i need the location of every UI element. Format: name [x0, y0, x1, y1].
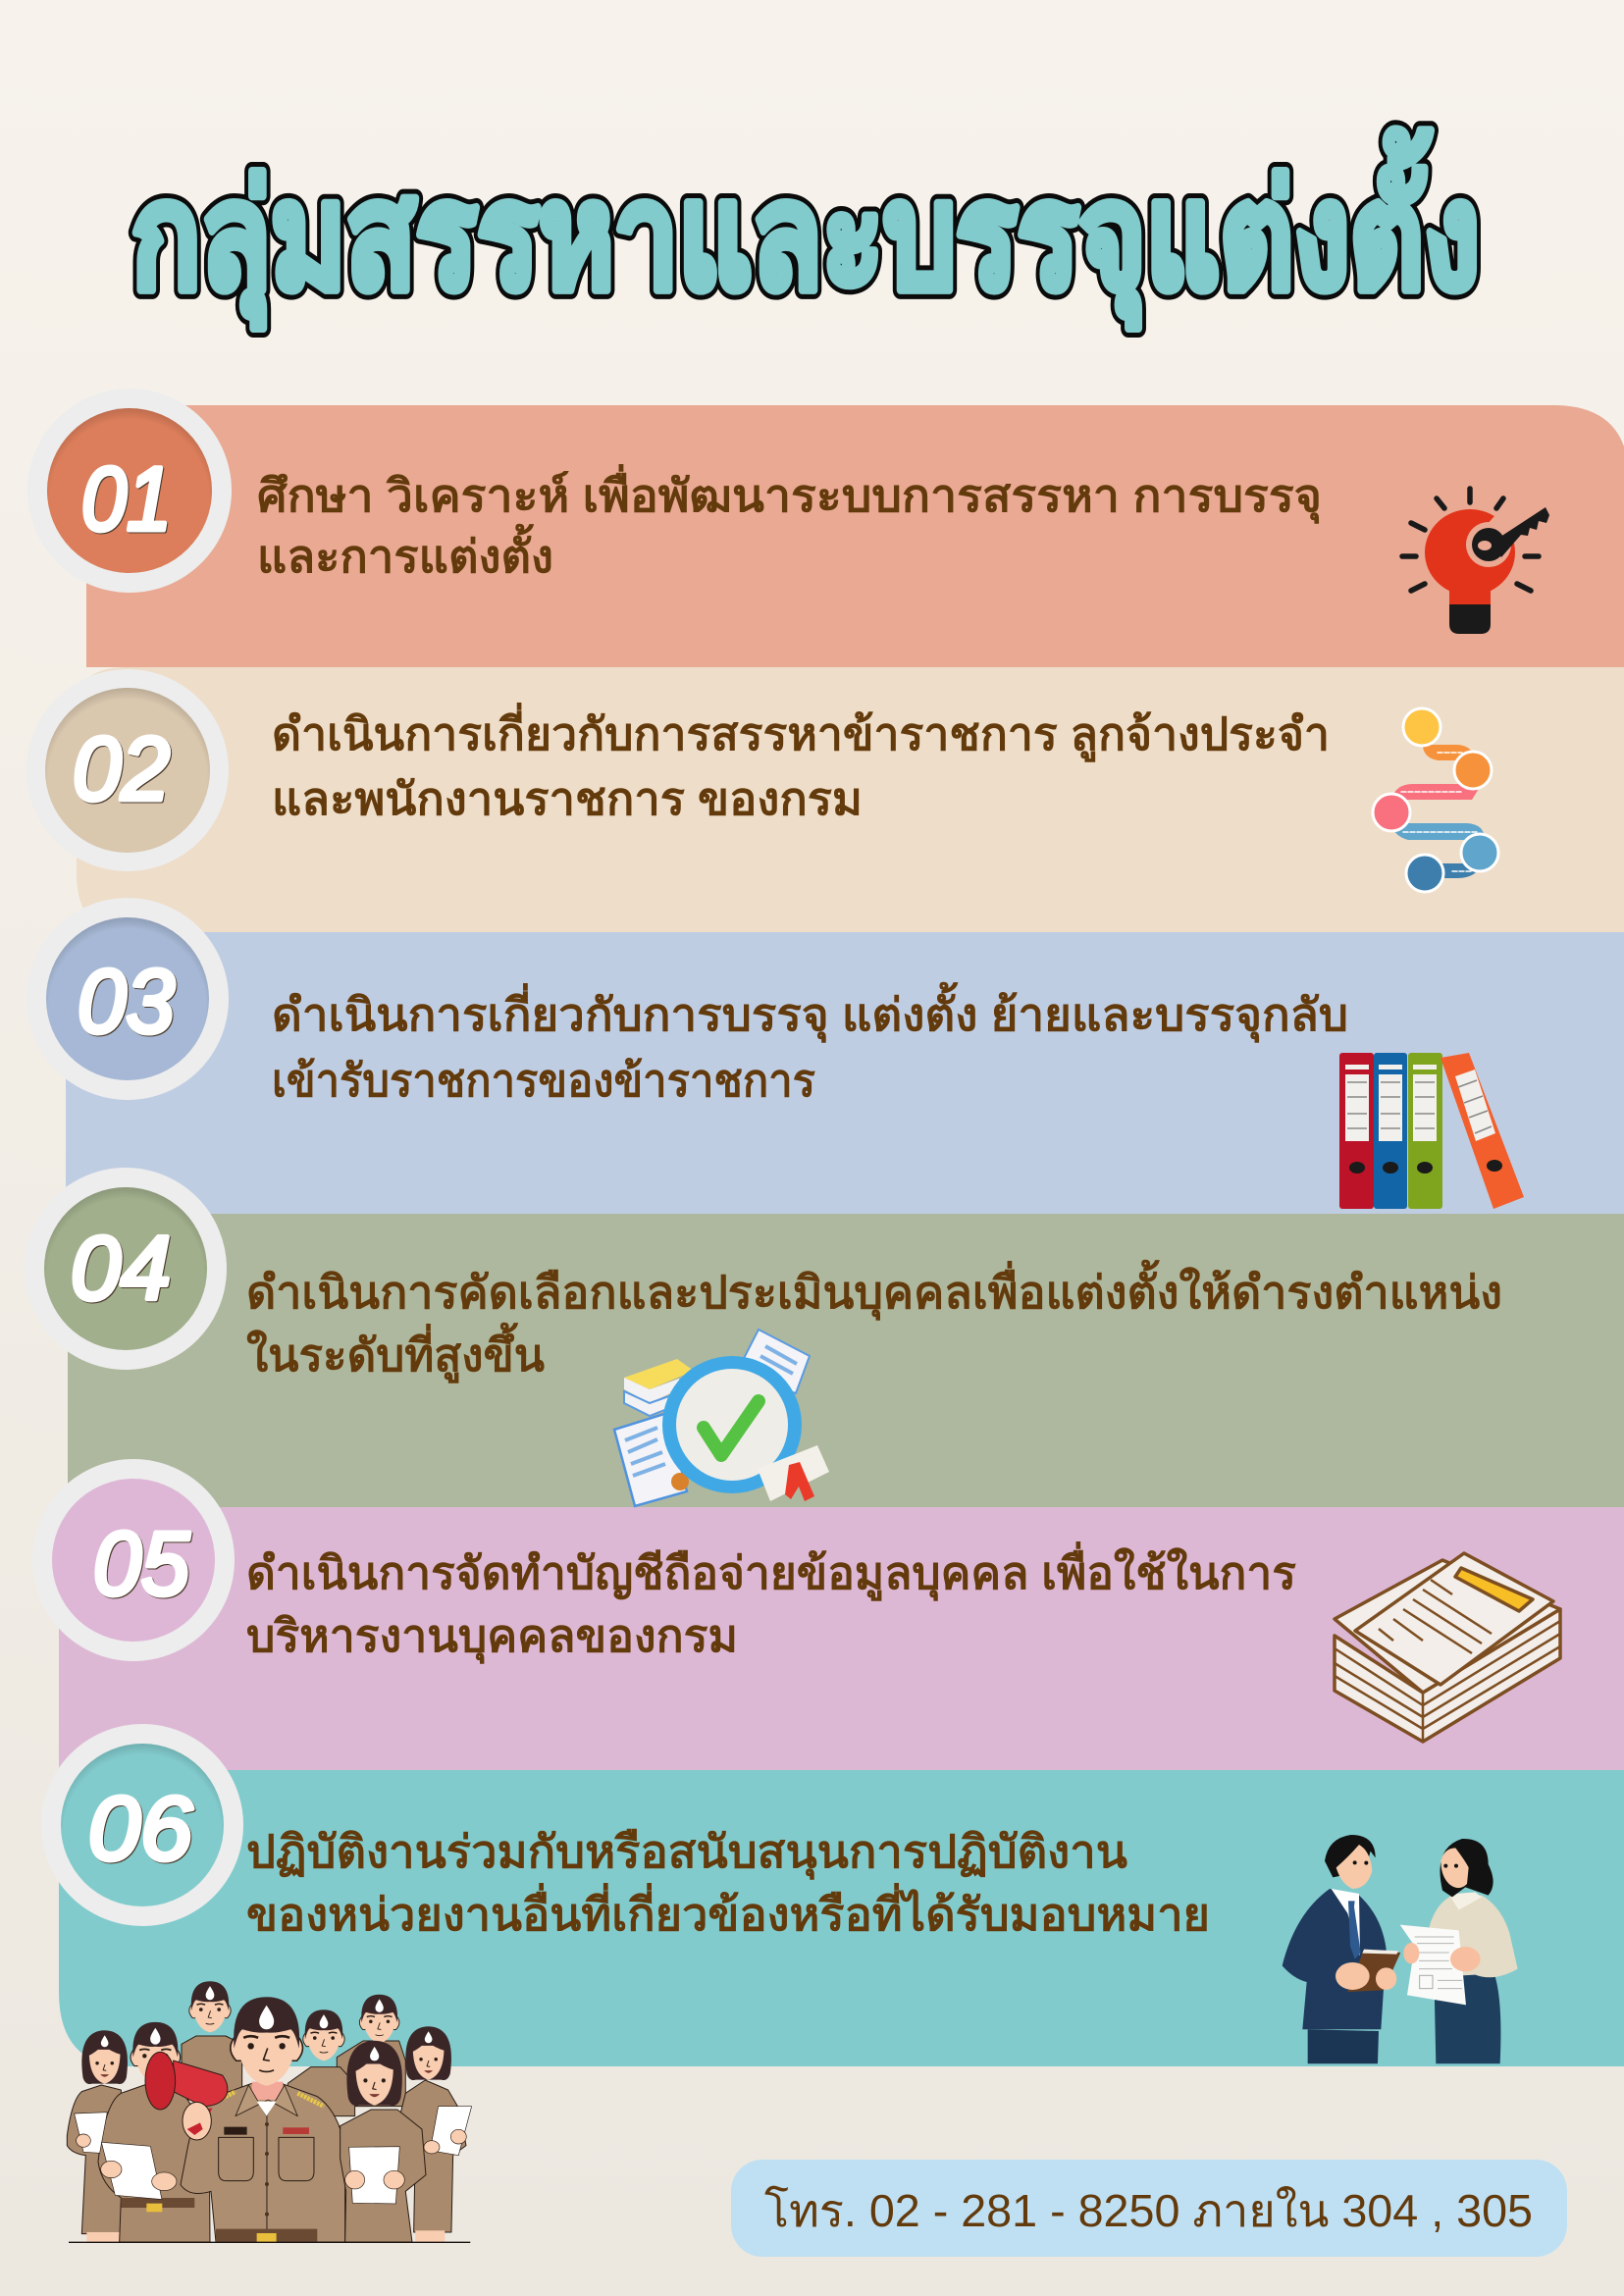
badge 03 — [26, 898, 229, 1100]
panel: 06 band — [59, 1770, 1624, 2066]
text 04: ในระดับที่สูงขึ้น — [246, 1322, 546, 1383]
badge 02 — [26, 669, 229, 871]
text 03: ดำเนินการเกี่ยวกับการบรรจุ แต่งตั้ง ย้ายและบรรจุกลับ — [272, 981, 1348, 1043]
text 05: ดำเนินการจัดทำบัญชีถือจ่ายข้อมูลบุคคล เพื่อใช้ในการ — [246, 1541, 1296, 1601]
text 02 — [272, 703, 1330, 824]
badge 03: 03 — [78, 952, 175, 1052]
text 02: และพนักงานราชการ ของกรม — [272, 773, 863, 824]
text 04 — [246, 1259, 1502, 1383]
badge 06 — [41, 1724, 243, 1926]
contact phone text: โทร. 02 - 281 - 8250 ภายใน 304 , 305 — [764, 2185, 1533, 2236]
text 01: และการแต่งตั้ง — [257, 523, 553, 582]
icon: paper stack — [1335, 1553, 1560, 1742]
badge 04 — [25, 1168, 227, 1370]
icon: checkmark with documents — [614, 1330, 829, 1506]
panel: 02 band — [77, 667, 1624, 932]
badge 05: 05 — [93, 1514, 190, 1614]
badge 02: 02 — [73, 719, 170, 819]
text 06 — [246, 1826, 1210, 1940]
badge 06: 06 — [88, 1779, 193, 1879]
panel: 04 band — [68, 1214, 1624, 1507]
icon: winding steps — [1373, 708, 1498, 892]
badge 01: 01 — [81, 449, 172, 549]
text 05: บริหารงานบุคคลของกรม — [246, 1610, 738, 1664]
badge 01 — [27, 389, 232, 593]
text 05 — [246, 1541, 1296, 1664]
text 03 — [272, 981, 1348, 1106]
text 06: ปฏิบัติงานร่วมกับหรือสนับสนุนการปฏิบัติงาน — [246, 1826, 1128, 1880]
contact pill — [731, 2160, 1567, 2257]
text 04: ดำเนินการคัดเลือกและประเมินบุคคลเพื่อแต่งตั้งให้ดำรงตำแหน่ง — [246, 1259, 1502, 1321]
icon: light bulb with key — [1402, 489, 1549, 634]
text 01: ศึกษา วิเคราะห์ เพื่อพัฒนาระบบการสรรหา การบรรจุ — [257, 464, 1322, 524]
panel: 05 band — [59, 1507, 1624, 1770]
badge 04: 04 — [71, 1219, 171, 1319]
text 01 — [257, 464, 1322, 582]
panel: 03 band — [66, 932, 1624, 1214]
text 03: เข้ารับราชการของข้าราชการ — [272, 1055, 815, 1106]
icon: binders — [1339, 1053, 1524, 1209]
badge 05 — [32, 1459, 235, 1661]
panel: 01 band — [86, 405, 1624, 667]
text 06: ของหน่วยงานอื่นที่เกี่ยวข้องหรือที่ได้รับมอบหมาย — [246, 1883, 1210, 1940]
icon: officers group — [67, 1981, 472, 2242]
icon: two colleagues — [1283, 1835, 1518, 2063]
text 02: ดำเนินการเกี่ยวกับการสรรหาข้าราชการ ลูกจ้างประจำ — [272, 703, 1330, 762]
